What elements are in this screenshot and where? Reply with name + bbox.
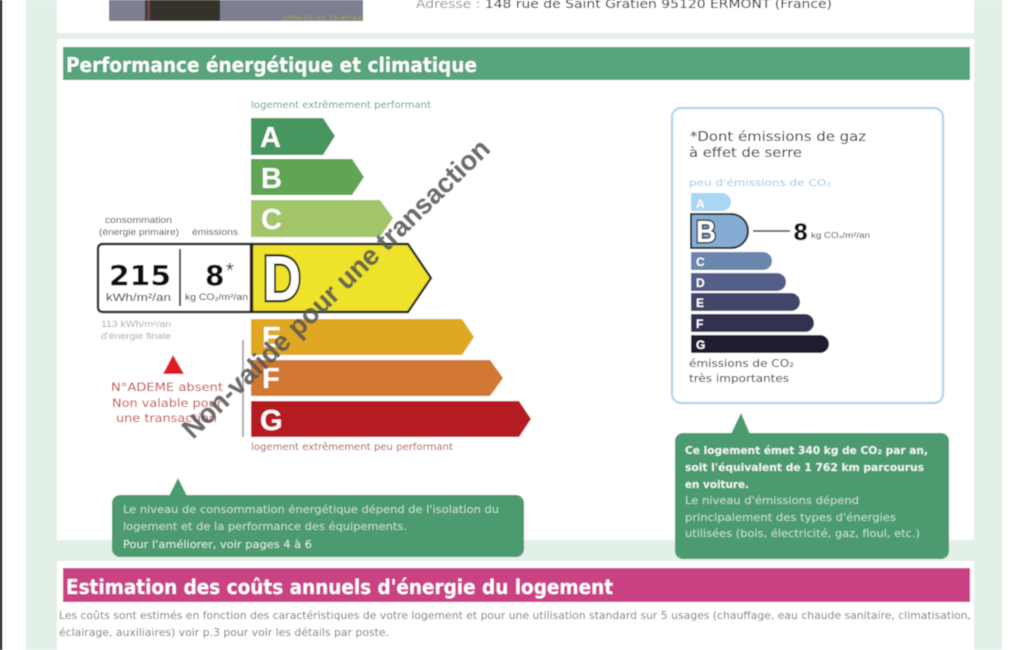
current rating D with values: kg CO₂/m²/an bbox=[185, 292, 248, 302]
scale bottom label: émissions de CO₂ bbox=[689, 358, 794, 370]
ADEME warning: N°ADEME absent bbox=[111, 380, 224, 394]
scale top label: peu d'émissions de CO₂ bbox=[689, 177, 831, 189]
class B current: kg CO₂/m²/an bbox=[811, 231, 870, 240]
final energy note bbox=[101, 319, 171, 341]
class B current bbox=[691, 214, 870, 249]
watermark: Non-valide pour une transaction bbox=[176, 133, 496, 444]
panel: greenhouse gas scale bbox=[672, 108, 943, 403]
current rating D with values: kWh/m²/an bbox=[106, 292, 171, 304]
photo of the property bbox=[109, 0, 363, 22]
panel: performance bbox=[57, 39, 974, 540]
panel: property summary bbox=[57, 0, 974, 33]
callout: consumption: Le niveau de consommation énergétique dépend de l'isolation du bbox=[123, 503, 499, 516]
energy class E bbox=[251, 319, 474, 355]
final energy note: d'énergie finale bbox=[101, 331, 171, 341]
warning triangle bbox=[163, 355, 184, 374]
callout: emissions: soit l'équivalent de 1 762 km parcourus bbox=[685, 461, 924, 474]
callout: consumption: Pour l'améliorer, voir pages 4 à 6 bbox=[123, 538, 312, 551]
final energy note: 113 kWh/m²/an bbox=[101, 319, 171, 329]
current rating D with values: 8 bbox=[205, 259, 224, 292]
greenhouse heading: *Dont émissions de gaz bbox=[690, 129, 866, 145]
class A bbox=[691, 193, 731, 211]
callout: consumption bbox=[112, 478, 524, 557]
energy class A bbox=[251, 118, 335, 155]
heading: performance bbox=[63, 47, 970, 80]
energy class A: A bbox=[260, 122, 281, 154]
ADEME warning: Non valable pour bbox=[112, 396, 222, 410]
costs description: éclairage, auxiliaires) voir p.3 pour voir les détails par poste. bbox=[59, 626, 389, 639]
heading: annual costs: Estimation des coûts annuels d'énergie du logement bbox=[66, 575, 613, 599]
callout: consumption: logement et de la performance des équipements. bbox=[123, 520, 407, 533]
class A: A bbox=[696, 197, 705, 211]
class D bbox=[691, 273, 786, 291]
class F: F bbox=[696, 317, 703, 331]
energy class B: B bbox=[261, 163, 282, 195]
scale bottom label: très importantes bbox=[689, 373, 789, 385]
class B current: B bbox=[696, 214, 716, 249]
energy class G bbox=[251, 401, 531, 437]
class E: E bbox=[696, 296, 704, 310]
current rating D with values: * bbox=[226, 260, 234, 282]
heading: performance: Performance énergétique et climatique bbox=[66, 53, 477, 77]
current rating D with values bbox=[98, 244, 431, 314]
callout: emissions: en voiture. bbox=[685, 478, 749, 491]
energy scale bottom label: logement extrêmement peu performant bbox=[251, 442, 453, 453]
class D: D bbox=[696, 276, 705, 290]
photo of the property: 2008-01-21 15:40:44 bbox=[282, 16, 363, 22]
ADEME warning: une transaction bbox=[116, 411, 217, 425]
costs description: Les coûts sont estimés en fonction des caractéristiques de votre logement et pour une utilisation standard sur 5 usages (chauffage, eau chaude sanitaire, climatisation, bbox=[59, 609, 971, 622]
callout: emissions: Le niveau d'émissions dépend bbox=[685, 494, 859, 507]
class C bbox=[691, 252, 772, 270]
class G: G bbox=[696, 338, 705, 352]
consumption and emissions labels: émissions bbox=[192, 227, 239, 237]
panel: annual costs bbox=[57, 561, 974, 650]
costs description bbox=[59, 609, 971, 639]
class G bbox=[691, 335, 829, 353]
energy class F: F bbox=[262, 363, 280, 395]
callout: emissions: principalement des types d'énergies bbox=[685, 511, 896, 524]
energy scale top label: logement extrêmement performant bbox=[251, 100, 431, 111]
scale bottom label bbox=[689, 358, 794, 385]
callout: emissions: Ce logement émet 340 kg de CO₂ par an, bbox=[685, 444, 928, 457]
energy class C bbox=[251, 200, 393, 237]
callout: emissions bbox=[675, 413, 949, 559]
consumption and emissions labels bbox=[99, 215, 239, 237]
current rating D with values: 215 bbox=[109, 259, 171, 292]
class E bbox=[691, 293, 800, 311]
consumption and emissions labels: (énergie primaire) bbox=[99, 227, 179, 237]
ADEME warning bbox=[111, 380, 224, 425]
class F bbox=[691, 314, 814, 332]
class B current: 8 bbox=[793, 221, 808, 246]
callout: emissions: utilisées (bois, électricité, gaz, fioul, etc.) bbox=[685, 527, 920, 540]
energy class B bbox=[251, 159, 364, 195]
greenhouse heading: à effet de serre bbox=[689, 145, 802, 161]
energy class G: G bbox=[260, 405, 283, 437]
consumption and emissions labels: consommation bbox=[105, 215, 172, 225]
class C: C bbox=[696, 255, 705, 269]
energy class E: E bbox=[262, 322, 281, 354]
energy class F bbox=[251, 360, 503, 396]
heading: annual costs bbox=[63, 568, 970, 602]
current rating D with values: D bbox=[263, 244, 301, 314]
greenhouse heading bbox=[689, 129, 866, 161]
energy class C: C bbox=[261, 204, 282, 236]
